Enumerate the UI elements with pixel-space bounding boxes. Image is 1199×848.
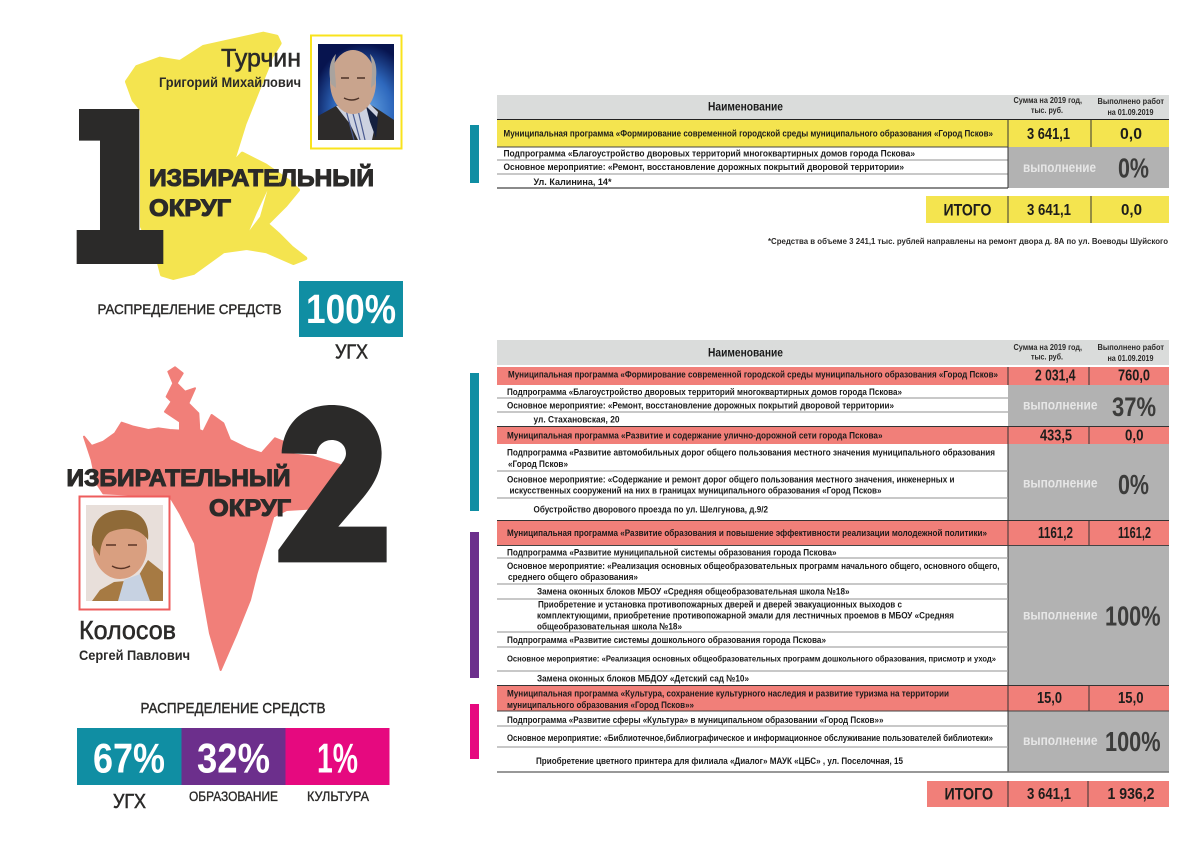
chart: funds distribution [77,728,390,813]
detail rows: культура: Приобретение цветного принтера для филиала «Диалог» МАУК «ЦБС» , ул. Поселочная, 15 [536,756,904,767]
programme row: дорожная сеть: Муниципальная программа «Развитие и содержание улично-дорожной сети города Пскова» [507,430,882,442]
programme row: культура: муниципального образования «Город Псков»» [507,700,694,711]
programme row: городская среда: 760,0 [1118,368,1150,384]
panel: district 1 [77,34,403,364]
marker: teal bar table 1 [470,125,479,183]
deputy name: Турчин: Турчин [221,44,301,72]
detail rows: культура: Основное мероприятие: «Библиотечное,библиографическое и информационное обслуживание пользователей библиотеки» [507,733,993,744]
grey completion blocks [1008,385,1169,772]
row lines [497,398,1169,772]
table: district 2 [497,340,1169,807]
label: распределение средств: РАСПРЕДЕЛЕНИЕ СРЕДСТВ [140,701,326,717]
programme row: образование: 1161,2 [1118,525,1151,542]
detail rows: образование: Основное мероприятие: «Реализация основных общеобразовательных программ дошкольного образования, присмотр и уход» [507,654,996,664]
programme row: образование [497,520,1169,546]
detail rows: образование: Замена оконных блоков МБДОУ «Детский сад №10» [537,674,749,684]
total row [927,781,1169,807]
total row: 0,0 [1121,202,1142,219]
detail rows: автомобильные дороги: 0% [1118,469,1149,500]
segment: образование 32%: ОБРАЗОВАНИЕ [189,789,278,804]
total row: 3 641,1 [1027,786,1071,803]
map: district 2 coral shape [84,367,340,670]
detail rows: благоустройство [507,387,1156,426]
total row: ИТОГО [944,784,993,804]
segment: культура 1% [286,728,390,804]
big number 2 [278,405,387,562]
marker: purple bar table 2 [470,532,479,678]
completion block 0%: выполнение [1023,160,1096,175]
table header: Выполнено работ [1098,342,1164,352]
table header: Наименование [708,348,783,360]
detail rows: автомобильные дороги: искусственных сооружений на них в границах муниципального образования «Город Псков» [510,486,882,496]
photo: Колосов [80,496,170,610]
segment: образование 32% [182,728,286,804]
programme row: городская среда: 2 031,4 [1035,368,1076,384]
segment: УГХ 67% [77,728,182,813]
heading: district 1 [149,164,374,222]
table header: Сумма на 2019 год, [1014,342,1082,352]
total row: ИТОГО [944,200,992,220]
table header [497,340,1169,365]
photo: Турчин [311,36,402,148]
programme row: городская среда: Муниципальная программа «Формирование современной городской среды муниципального образования «Город Псков» [508,370,998,380]
detail rows: автомобильные дороги: «Город Псков» [508,459,568,470]
completion block 0% [1008,147,1169,188]
programme row: образование: Муниципальная программа «Развитие образования и повышение эффективности реализации молодежной политики» [507,528,987,539]
detail rows: автомобильные дороги: Подпрограмма «Развитие автомобильных дорог общего пользования местного значения муниципального образования [507,448,995,458]
table header [497,95,1169,119]
detail rows: благоустройство: ул. Стахановская, 20 [534,414,620,426]
detail rows: образование: Основное мероприятие: «Реализация основных общеобразовательных программ начального общего, основного общего, [507,561,1000,572]
detail rows: образование: 100% [1105,600,1161,632]
heading: district 2: ОКРУГ [209,495,291,522]
heading: district 2 [66,464,291,522]
table header: тыс. руб. [1031,352,1063,362]
detail rows: образование: Приобретение и установка противопожарных дверей и дверей эвакуационных выходов с [538,600,903,610]
table header: Сумма на 2019 год, [1014,95,1082,105]
segment: УГХ 67%: 67% [93,734,165,782]
detail rows: культура [507,715,1161,767]
total row: 3 641,1 [1027,202,1071,219]
programme row: культура: 15,0 [1037,690,1062,707]
detail rows: автомобильные дороги: Основное мероприятие: «Содержание и ремонт дорог общего пользования местного значения, инженерных и [507,474,955,486]
label: распределение средств: РАСПРЕДЕЛЕНИЕ СРЕДСТВ [98,301,282,317]
table header: Выполнено работ [1098,96,1164,106]
detail rows: Подпрограмма «Благоустройство дворовых территорий многоквартирных домов города Пскова» [504,148,915,160]
detail rows: благоустройство: Основное мероприятие: «Ремонт, восстановление дорожных покрытий дворовой территории» [507,400,894,412]
table header: Наименование [708,102,783,114]
panel: district 2 [66,367,390,813]
stat: 100% УГХ: 100% [306,286,396,332]
notch in map [249,191,267,231]
deputy name: Колосов [79,615,190,663]
programme row: культура: Муниципальная программа «Культура, сохранение культурного наследия и развитие туризма на территории [507,688,949,700]
programme row: культура: 15,0 [1118,690,1144,707]
detail rows: автомобильные дороги: Обустройство дворового проезда по ул. Шелгунова, д.9/2 [534,504,768,516]
programme row: дорожная сеть: 0,0 [1125,428,1144,444]
heading: district 1: ИЗБИРАТЕЛЬНЫЙ [149,164,374,192]
table header: на 01.09.2019 [1108,353,1154,363]
detail rows: благоустройство: выполнение [1023,398,1098,412]
detail rows: Основное мероприятие: «Ремонт, восстановление дорожных покрытий дворовой территории» [504,162,904,173]
detail rows: культура: Подпрограмма «Развитие сферы «Культура» в муниципальном образовании «Город Псков»» [507,715,884,726]
detail rows: культура: 100% [1105,726,1161,757]
detail rows: образование [507,548,1161,684]
programme row: дорожная сеть: 433,5 [1040,428,1072,444]
detail rows: культура: выполнение [1023,733,1098,748]
segment: УГХ 67%: УГХ [113,791,146,813]
footnote: *Средства в объеме 3 241,1 тыс. рублей направлены на ремонт двора д. 8А по ул. Воеводы Шуйского [768,236,1168,246]
detail rows: образование: среднего общего образования» [508,572,638,583]
table header: на 01.09.2019 [1108,107,1154,117]
detail rows: образование: выполнение [1023,608,1098,622]
detail rows: благоустройство: 37% [1112,392,1156,422]
detail rows: образование: Подпрограмма «Развитие муниципальной системы образования города Пскова» [507,548,836,558]
heading: district 1: ОКРУГ [149,195,231,222]
detail rows: Ул. Калинина, 14* [534,177,612,188]
detail rows: образование: Замена оконных блоков МБОУ «Средняя общеобразовательная школа №18» [537,586,850,598]
heading: district 2: ИЗБИРАТЕЛЬНЫЙ [66,464,290,492]
detail rows: автомобильные дороги [507,448,1149,516]
stat: 100% УГХ [299,281,403,364]
total row [926,196,1169,223]
completion block 0%: 0% [1118,152,1149,184]
detail rows: образование: общеобразовательная школа №18» [537,622,682,632]
programme row [497,120,1169,147]
programme row: образование: 1161,2 [1038,525,1073,542]
table header: тыс. руб. [1031,105,1063,115]
detail rows: образование: комплектующими, приобретение противопожарной эмали для лестничных проемов в МБОУ «Средняя [537,610,954,622]
table: district 1 [497,95,1169,246]
detail rows: образование: Подпрограмма «Развитие системы дошкольного образования города Пскова» [507,635,826,646]
deputy name: Турчин [159,44,301,90]
stat: 100% УГХ: УГХ [335,342,368,364]
programme row: 3 641,1 [1027,126,1070,143]
segment: образование 32%: 32% [197,734,270,782]
detail rows: автомобильные дороги: выполнение [1023,476,1098,490]
deputy name: Колосов: Сергей Павлович [79,647,190,663]
deputy name: Колосов: Колосов [79,615,176,645]
programme row: культура [497,686,1169,711]
detail rows: благоустройство: Подпрограмма «Благоустройство дворовых территорий многоквартирных домов города Пскова» [507,387,902,398]
programme row: Муниципальная программа «Формирование современной городской среды муниципального образования «Город Псков» [504,128,993,140]
marker: teal bar table 2 [470,373,479,511]
programme row: дорожная сеть [497,426,1169,444]
big number 1 [77,109,163,264]
total row: 1 936,2 [1108,786,1155,803]
deputy name: Турчин: Григорий Михайлович [159,75,301,90]
segment: культура 1%: КУЛЬТУРА [307,789,369,804]
detail rows [497,147,1008,188]
programme row: 0,0 [1120,126,1142,143]
marker: magenta bar table 2 [470,704,479,759]
programme row: городская среда [497,367,1169,385]
segment: культура 1%: 1% [317,734,358,782]
map: district 1 yellow shape [127,34,305,278]
